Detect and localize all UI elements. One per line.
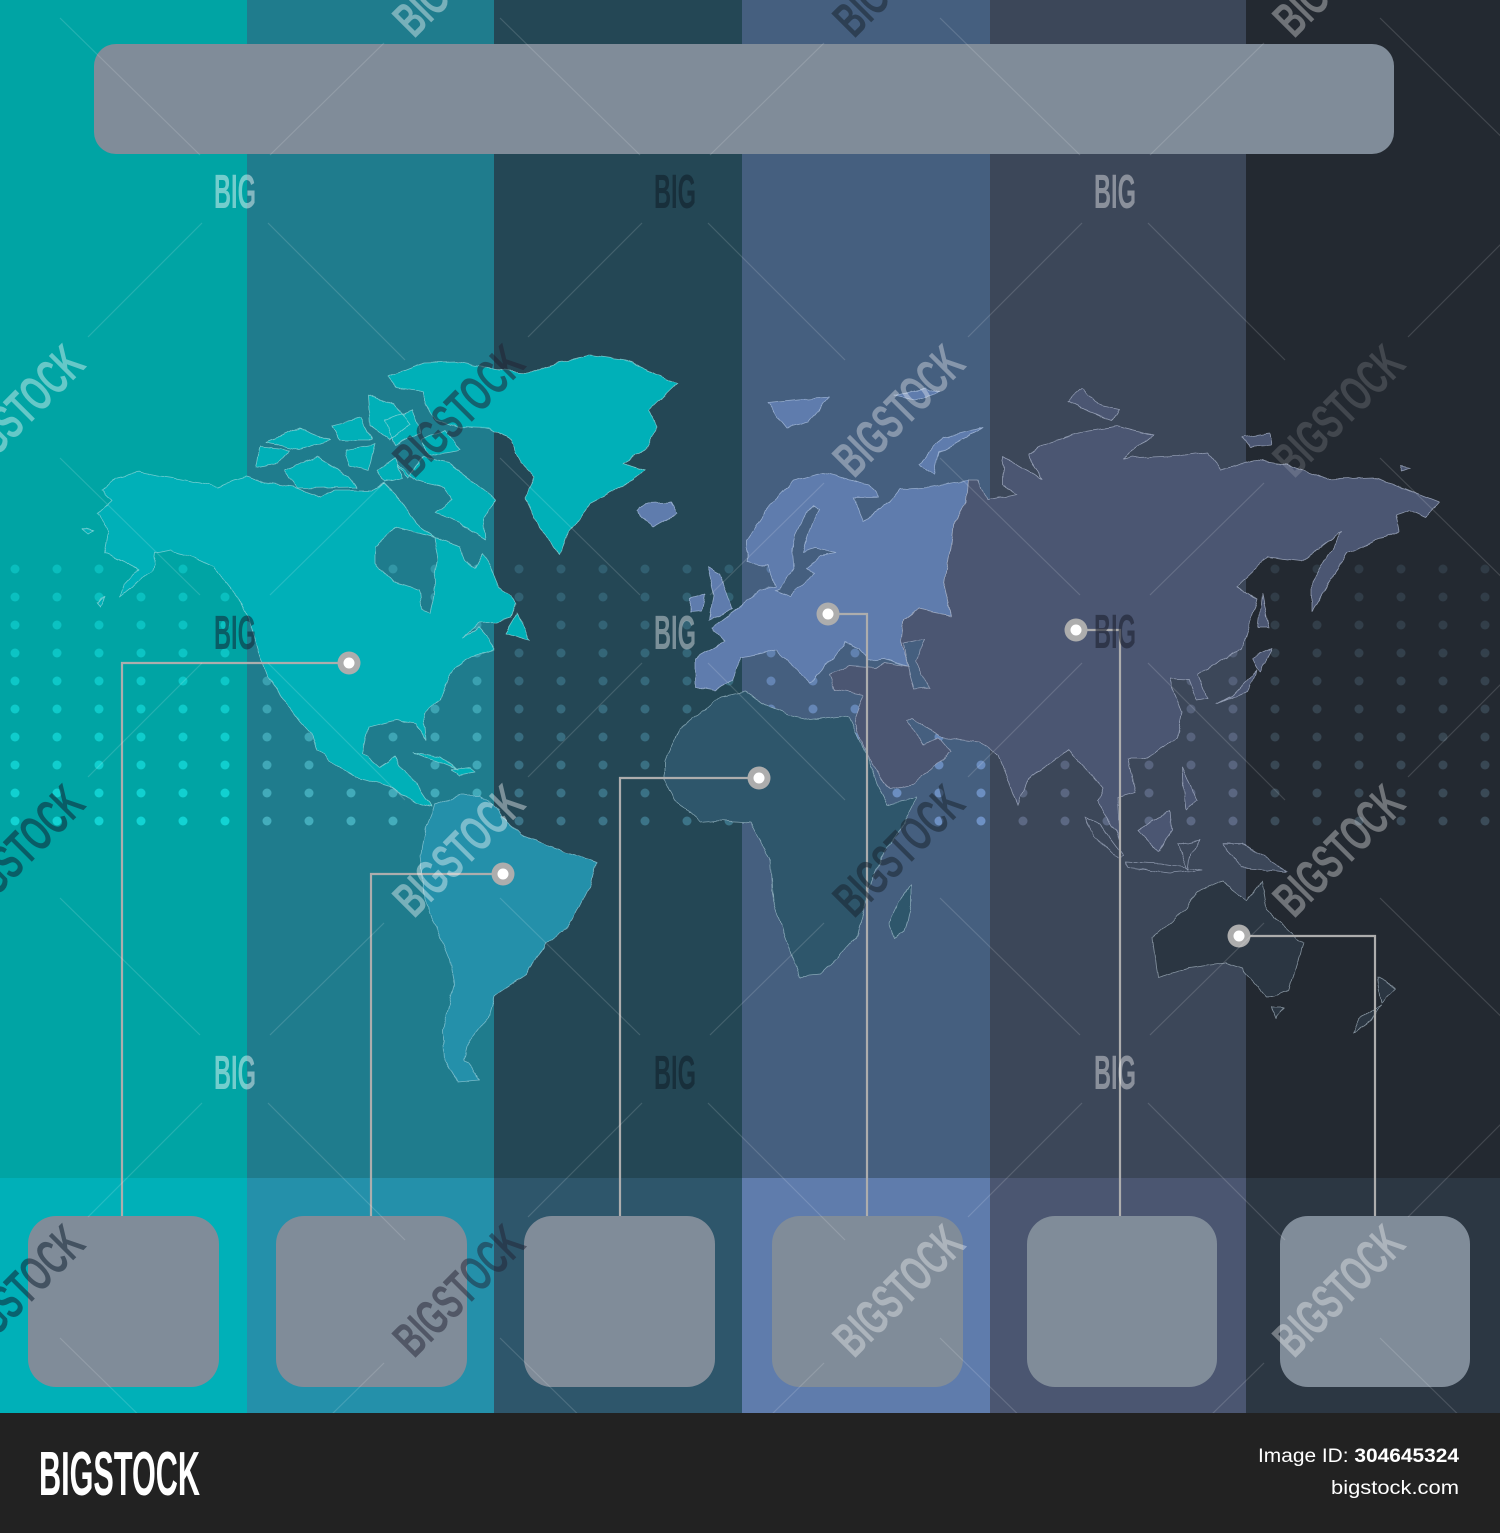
location pins [338,602,1250,948]
arctic islands [266,395,460,482]
watermark: diagonal BIGSTOCK marks: BIGSTOCK [1262,1214,1415,1367]
Caspian sea [904,639,929,689]
continent: Australia and New Zealand [1153,881,1396,1034]
Great Britain [707,567,732,620]
footer bar [0,1413,1500,1533]
Japan [1217,649,1272,704]
Java and Lesser Sunda [1125,862,1202,873]
continent: Africa [665,692,917,977]
Borneo [1138,811,1172,851]
Victoria island [284,457,357,488]
infographic canvas: BIG [1094,606,1136,659]
watermark: BIG marks: BIG [214,1047,256,1100]
Severnaya islands [1068,388,1120,420]
continent: South America [420,795,596,1082]
Baltic sea [775,506,836,596]
lower colour band [0,1178,1500,1413]
connector lines [122,614,1375,1216]
Baffin island [392,457,495,540]
footer bar: BIGSTOCK [39,1440,200,1509]
watermark: diagonal BIGSTOCK marks: BIGSTOCK [822,1214,975,1367]
watermark: diagonal BIGSTOCK marks: BIGSTOCK [382,1214,535,1367]
site address: bigstock.com [1331,1478,1459,1499]
Banks island [256,447,290,467]
Cuba and Caribbean [412,752,475,775]
halftone dot field [0,555,1500,835]
continent: Asia [829,388,1439,851]
Iceland [638,502,677,527]
Philippines [1182,767,1197,810]
Svalbard [767,397,829,428]
placeholder boxes [28,1216,1470,1387]
Sakhalin [1258,595,1269,628]
background colour columns [0,0,1500,1178]
watermark: BIG marks: BIG [654,607,696,660]
watermark: diagonal BIGSTOCK marks: BIGSTOCK [1262,774,1415,927]
Tasmania [1272,1007,1284,1020]
New Zealand [1353,978,1396,1034]
image id: Image ID: 304645324 [1258,1446,1459,1467]
watermark: diagonal BIGSTOCK marks: BIGSTOCK [382,774,535,927]
Aleutians [82,528,105,606]
Novaya Zemlya [919,428,983,475]
watermark: diagonal BIGSTOCK marks: BIGSTOCK [382,334,535,487]
watermark: diagonal BIGSTOCK marks: BIGSTOCK [822,334,975,487]
watermark: diagonal BIGSTOCK marks: BIGSTOCK [822,774,975,927]
infographic canvas: BIG [1094,1047,1136,1100]
infographic canvas: BIG [1094,166,1136,219]
watermark: BIG marks [214,166,1136,1100]
Newfoundland [505,613,529,640]
continent: North America [82,355,677,807]
Greenland and Ellesmere [388,355,677,555]
world map [82,355,1439,1082]
New Siberian islands [1242,433,1410,471]
watermark: BIG marks: BIG [654,166,696,219]
watermark: BIG marks: BIG [654,1047,696,1100]
watermark: BIG marks: BIG [214,607,256,660]
continent: Europe [638,388,983,691]
New Guinea [1222,843,1287,872]
Madagascar [889,885,911,938]
Sulawesi [1178,840,1200,870]
Franz Josef [895,388,940,400]
watermark: diagonal BIGSTOCK marks: BIGSTOCK [1262,334,1415,487]
Ireland [690,595,705,612]
watermark: BIG marks: BIG [214,166,256,219]
Sumatra [1085,818,1123,858]
islands: Indonesia and New Guinea [1085,818,1287,873]
title placeholder bar [94,44,1394,154]
